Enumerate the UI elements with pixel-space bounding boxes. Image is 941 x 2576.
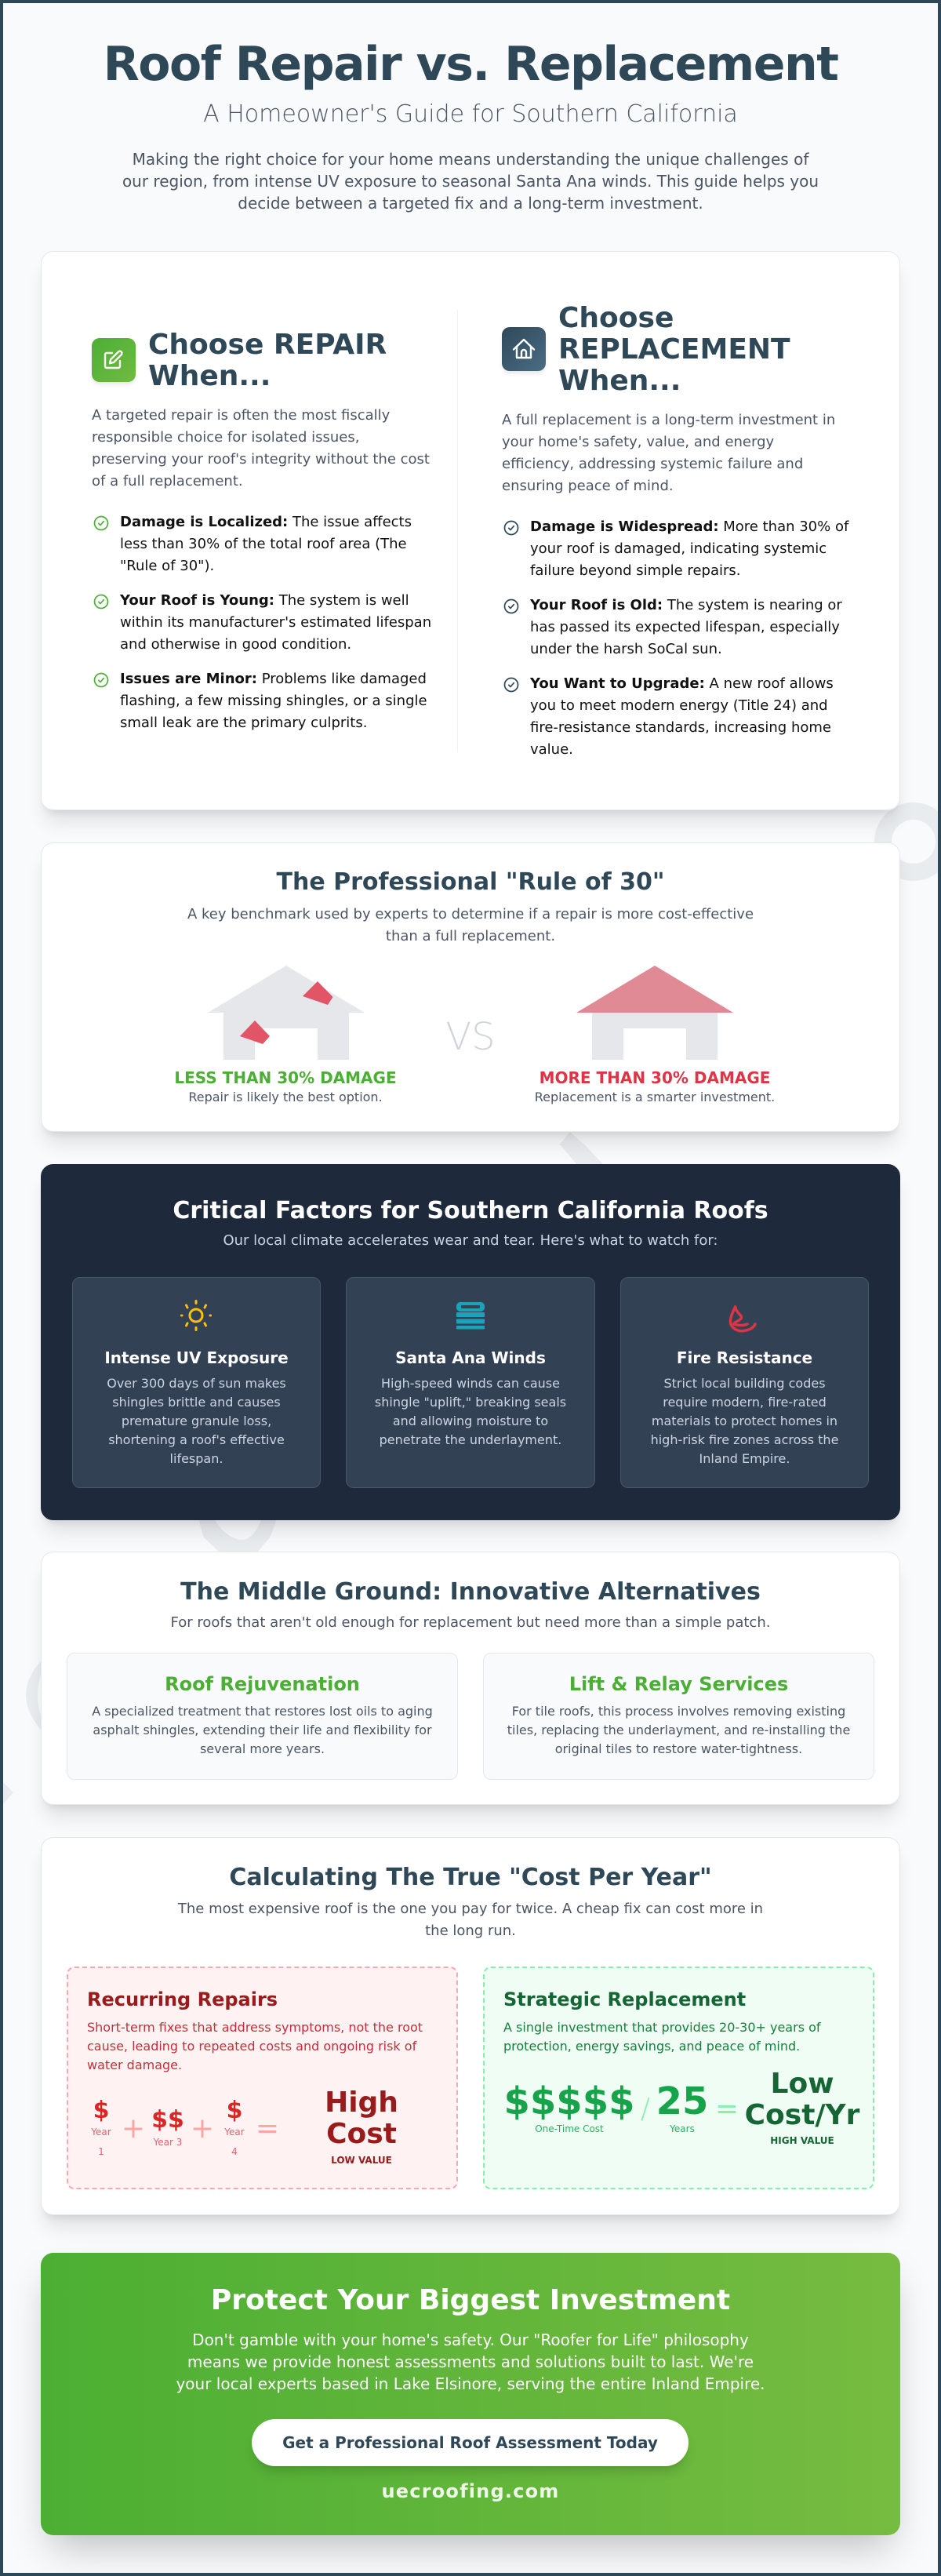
heading: Calculating The True "Cost Per Year" [229,1864,712,1891]
panel: rule of 30 [41,842,900,1132]
icon: check [94,516,108,530]
panel: middle ground [41,1552,900,1805]
replacement intro: A full replacement is a long-term investment in [502,412,835,428]
alternative text: lift and relay: original tiles to restore water-tightness. [555,1741,802,1756]
label: year 4: 4 [231,2146,238,2157]
heading: Protect Your Biggest Investment [211,2284,730,2316]
alternative text: rejuvenation [92,1704,433,1756]
factor title: uv: Intense UV Exposure [104,1348,289,1367]
panel: repair vs replacement [41,251,900,810]
factor text: wind: and allowing moisture to [393,1414,548,1428]
icon: check [503,599,519,613]
list item: upgrade: You Want to Upgrade: A new roof allows [530,675,834,692]
list item: widespread [530,518,849,579]
panel: cost per year [41,1837,900,2215]
panel: strategic replacement [483,1967,874,2189]
subtitle: A Homeowner's Guide for Southern California [203,100,738,128]
icon: check [94,595,108,609]
factor text: wind: shingle "uplift," breaking seals [375,1395,566,1410]
factor text: wind: High-speed winds can cause [381,1376,560,1391]
alternative text: rejuvenation: asphalt shingles, extending their life and flexibility for [93,1723,432,1737]
replacement intro: ensuring peace of mind. [502,478,674,494]
label: year 4: Year [224,2127,245,2138]
number: years: 25 [656,2079,708,2123]
label: one-time cost: One-Time Cost [535,2123,604,2134]
icon: fire [729,1305,757,1332]
result: low cost per year [745,2068,859,2131]
intro text [122,150,819,213]
list item: old: under the harsh SoCal sun. [530,641,722,657]
label: year 1 [91,2127,111,2157]
caption: repair: Repair is likely the best option. [188,1090,383,1104]
replacement intro: efficiency, addressing systemic failure and [502,456,803,472]
heading: choose repair: When... [148,360,271,392]
panel: critical factors [41,1164,900,1520]
result: high cost [325,2087,398,2150]
alternative card: rejuvenation [67,1653,458,1780]
caption: replacement: Replacement is a smarter investment. [535,1090,775,1104]
factor text: fire: require modern, fire-rated [663,1395,827,1410]
replacement intro [502,412,835,494]
result: high cost: High [325,2087,398,2119]
dollar: year 1: $ [93,2097,109,2124]
recurring text: cause, leading to repeated costs and ongoing risk of [87,2039,416,2054]
description [187,906,754,944]
intro text: Making the right choice for your home means understanding the unique challenges of [133,150,808,169]
result: low cost per year: Low [771,2068,834,2100]
list item: upgrade: you to meet modern energy (Title 24) and [530,697,828,714]
description: means we provide honest assessments and solutions built to last. We're [187,2352,754,2371]
strategic text [503,2020,821,2054]
title: Roof Repair vs. Replacement [104,37,837,92]
description: For roofs that aren't old enough for replacement but need more than a simple patch. [171,1614,770,1631]
list item: widespread: Damage is Widespread: More than 30% of [530,518,848,535]
list item: young [119,592,431,653]
alternative text: lift and relay: tiles, replacing the underlayment, and re-installing the [507,1723,850,1737]
alternative text: lift and relay: For tile roofs, this process involves removing existing [512,1704,845,1719]
plus: + [122,2112,145,2145]
equals: = [715,2093,739,2125]
list item: minor [120,671,427,731]
factor card: fire [620,1277,869,1488]
dollar: year 4: $ [227,2097,242,2124]
recurring text [87,2020,423,2072]
list item: localized: "Rule of 30"). [120,558,214,574]
description: the long run. [425,1923,516,1939]
icon: full roof damage house [576,966,733,1060]
heading: The Middle Ground: Innovative Alternatives [180,1578,761,1606]
replacement intro: your home's safety, value, and energy [502,434,774,450]
icon: check [94,673,108,687]
list item: widespread: your roof is damaged, indicating systemic [530,540,827,557]
list item: minor: Issues are Minor: Problems like damaged [120,671,427,687]
result: low cost per year: Cost/Yr [745,2099,859,2131]
icon: check [503,521,519,535]
panel: recurring repairs [67,1967,458,2189]
result label: high value: HIGH VALUE [770,2135,834,2146]
heading: choose replacement: Choose [558,302,674,334]
icon: check [503,678,519,692]
icon: sun [180,1300,212,1331]
factor text: uv: shortening a roof's effective [108,1432,285,1447]
factor text: uv: Over 300 days of sun makes [107,1376,286,1391]
heading: choose replacement: REPLACEMENT [558,333,790,366]
recurring title: Recurring Repairs [87,1988,278,2010]
list item: young: Your Roof is Young: The system is well [120,592,409,609]
result: high cost: Cost [326,2118,397,2150]
list item: old: Your Roof is Old: The system is nearing or [530,597,842,613]
recurring text: water damage. [87,2058,182,2072]
factor text: fire: materials to protect homes in [652,1414,837,1428]
repair intro: A targeted repair is often the most fiscally [92,407,390,424]
factor text: fire: high-risk fire zones across the [651,1432,838,1447]
icon: wind [456,1302,485,1329]
list item: upgrade [530,675,834,758]
factor text: fire: Inland Empire. [699,1451,790,1466]
slash: / [641,2093,650,2125]
factor text: uv: premature granule loss, [122,1414,271,1428]
description [177,1901,763,1939]
alternative title: lift and relay: Lift & Relay Services [569,1673,788,1695]
description: Don't gamble with your home's safety. Our "Roofer for Life" philosophy [192,2330,749,2349]
repair intro: responsible choice for isolated issues, [92,429,359,446]
intro text: decide between a targeted fix and a long-term investment. [238,194,703,213]
list item: minor: small leak are the primary culprits. [120,715,367,731]
list item: upgrade: fire-resistance standards, increasing home [530,719,831,736]
description: your local experts based in Lake Elsinore, serving the entire Inland Empire. [176,2374,765,2393]
label: year 4 [224,2127,245,2157]
alternative text: lift and relay [507,1704,850,1756]
factor title: wind: Santa Ana Winds [395,1348,546,1367]
label: less than 30: LESS THAN 30% DAMAGE [174,1068,397,1087]
label: years: Years [670,2123,695,2134]
alternative text: rejuvenation: several more years. [200,1741,325,1756]
icon: damaged house [209,966,364,1060]
label: year 1: 1 [98,2146,104,2157]
alternative title: rejuvenation: Roof Rejuvenation [165,1673,360,1695]
icon: edit [92,338,136,382]
button [252,2419,688,2466]
list item: upgrade: value. [530,741,573,758]
description: than a full replacement. [386,928,555,944]
repair intro [92,407,430,489]
result label: low value: LOW VALUE [331,2155,392,2166]
factor text: fire [651,1376,838,1466]
description [176,2330,765,2393]
heading: Critical Factors for Southern California Roofs [173,1197,768,1224]
website: uecroofing.com [381,2480,559,2502]
label: year 1: Year [91,2127,111,2138]
description: The most expensive roof is the one you pay for twice. A cheap fix can cost more in [178,1901,763,1917]
vs: VS [445,1015,496,1059]
alternative card: lift and relay [483,1653,874,1780]
list item: young: within its manufacturer's estimated lifespan [120,614,431,631]
label: more than 30: MORE THAN 30% DAMAGE [540,1068,770,1087]
description: Our local climate accelerates wear and tear. Here's what to watch for: [223,1232,718,1249]
factor title: fire: Fire Resistance [677,1348,812,1367]
list item: localized: less than 30% of the total roof area (The [120,536,407,552]
factor text: uv [107,1376,286,1466]
factor text: fire: Strict local building codes [663,1376,826,1391]
repair intro: preserving your roof's integrity without the cost [92,451,430,468]
list item: localized [120,514,412,574]
factor text: wind [375,1376,566,1447]
strategic title: Strategic Replacement [503,1988,746,2010]
strategic text: protection, energy savings, and peace of mind. [503,2039,800,2054]
factor card: wind [346,1277,595,1488]
list item: old: has passed its expected lifespan, especially [530,619,840,635]
list item: minor: flashing, a few missing shingles, or a single [120,693,427,709]
list item: localized: Damage is Localized: The issue affects [120,514,412,530]
button: Get a Professional Roof Assessment Today [282,2433,658,2452]
factor text: wind: penetrate the underlayment. [380,1432,561,1447]
panel: call to action [41,2253,900,2535]
alternative text: rejuvenation: A specialized treatment that restores lost oils to aging [92,1704,433,1719]
plus: + [191,2112,214,2145]
heading: choose replacement [558,302,790,397]
heading: The Professional "Rule of 30" [276,868,665,896]
factor text: uv: shingles brittle and causes [112,1395,281,1410]
list item: widespread: failure beyond simple repairs. [530,562,740,579]
equals: = [256,2112,279,2145]
divider [457,310,458,752]
repair intro: of a full replacement. [92,473,243,489]
list item: young: and otherwise in good condition. [120,636,351,653]
recurring text: Short-term fixes that address symptoms, not the root [87,2020,423,2035]
description: A key benchmark used by experts to determine if a repair is more cost-effective [187,906,754,922]
dollar: year 3: $$ [151,2106,184,2134]
list item: old [530,597,842,657]
icon: home [502,327,546,371]
heading: choose replacement: When... [558,365,681,397]
heading: choose repair: Choose REPAIR [148,329,387,361]
factor text: uv: lifespan. [170,1451,223,1466]
intro text: our region, from intense UV exposure to seasonal Santa Ana winds. This guide helps you [122,172,819,191]
label: year 3: Year 3 [154,2137,182,2148]
strategic text: A single investment that provides 20-30+ years of [503,2020,821,2035]
heading: choose repair [148,329,387,392]
dollars: one-time: $$$$$ [503,2079,635,2123]
factor card: uv [72,1277,321,1488]
